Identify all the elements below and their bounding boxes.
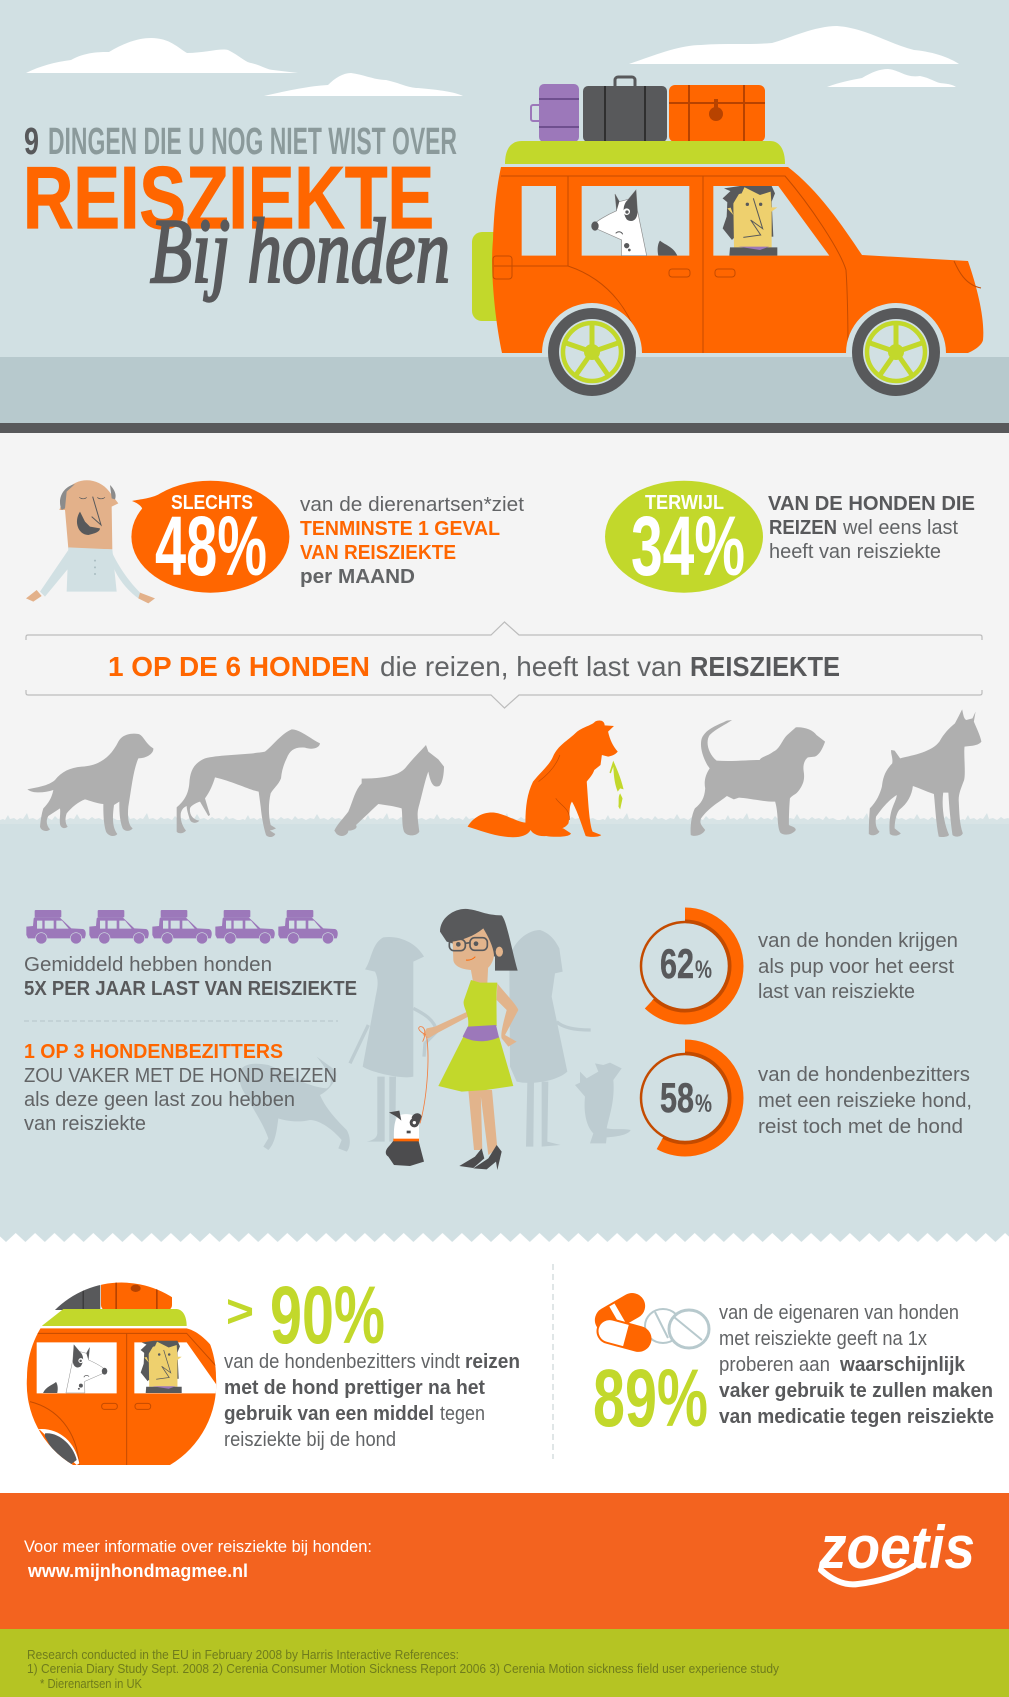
text: 89 percent: vaker gebruik te zullen maken xyxy=(719,1380,993,1402)
dog 6 boxer xyxy=(869,709,981,837)
banner: 1 op de 6 honden: REISZIEKTE xyxy=(690,651,840,682)
purple car icon row xyxy=(26,910,338,944)
zoetis logo: zoetis xyxy=(818,1514,975,1581)
stat: more than 90 percent: 90% xyxy=(270,1270,385,1361)
shadow owner left xyxy=(350,937,437,1142)
text: 90 percent: reizen xyxy=(465,1351,520,1373)
dog 2 greyhound xyxy=(177,729,320,837)
dog 1 labrador xyxy=(27,734,153,836)
legs and shoes xyxy=(468,1090,497,1155)
shadow figures xyxy=(239,930,631,1152)
orange footer xyxy=(0,1493,1009,1629)
wheels xyxy=(548,308,940,396)
wheel arches xyxy=(542,303,946,353)
text: 48 percent: van de dierenartsen*ziet xyxy=(300,494,524,516)
text: 48 percent xyxy=(300,494,524,588)
text: 58 percent: reist toch met de hond xyxy=(758,1116,963,1138)
title: bij honden: Bij honden xyxy=(150,200,450,302)
driver xyxy=(723,186,777,256)
car body xyxy=(492,167,983,353)
text: 62 percent: als pup voor het eerst xyxy=(758,956,954,978)
text: 1 op 3 hondenbezitters: 1 OP 3 HONDENBEZITTERS xyxy=(24,1041,283,1063)
text: 1 op 3 hondenbezitters: van reisziekte xyxy=(24,1113,146,1135)
text: 90 percent xyxy=(224,1351,520,1451)
text: 90 percent: reisziekte bij de hond xyxy=(224,1429,396,1451)
shadow dog left xyxy=(239,1057,350,1152)
text: 58 percent xyxy=(758,1064,972,1138)
text: 90 percent: tegen xyxy=(440,1403,485,1425)
text: 62 percent xyxy=(758,930,958,1003)
stat: more than 90 percent xyxy=(226,1270,385,1361)
lime footnote band xyxy=(0,1629,1009,1697)
clouds xyxy=(26,26,959,96)
text: 90 percent: gebruik van een middel xyxy=(224,1403,434,1425)
dog 5 bloodhound xyxy=(691,720,825,836)
lime footnote band: 1) Cerenia Diary Study Sept. 2008 2) Cerenia Consumer Motion Sickness Report 2006 3) Cerenia Motion sickness field user experience study xyxy=(27,1662,780,1676)
header panel xyxy=(0,0,1009,433)
text: 48 percent: VAN REISZIEKTE xyxy=(300,542,456,564)
luggage xyxy=(531,77,765,142)
text: 89 percent: waarschijnlijk xyxy=(839,1354,966,1376)
lime footnote band: Research conducted in the EU in February 2008 by Harris Interactive References: xyxy=(27,1648,459,1662)
donut chart 58 percent: % xyxy=(695,1090,712,1118)
donut chart 58 percent: 58 xyxy=(660,1074,694,1121)
text: 62 percent: van de honden krijgen xyxy=(758,930,958,952)
text: 1 op 3 hondenbezitters: als deze geen last zou hebben xyxy=(24,1089,295,1111)
banner: 1 op de 6 honden: 1 OP DE 6 HONDEN xyxy=(108,651,370,682)
text: 89 percent: van de eigenaren van honden xyxy=(719,1302,959,1324)
text: 48 percent: per MAAND xyxy=(300,566,415,588)
donut chart 58 percent xyxy=(632,1046,738,1150)
text: 34 percent: VAN DE HONDEN DIE xyxy=(768,493,975,515)
text: 90 percent: met de hond prettiger na het xyxy=(224,1377,485,1399)
shadow owner right xyxy=(509,930,591,1147)
text: 5x per jaar: 5X PER JAAR LAST VAN REISZIEKTE xyxy=(24,978,357,1000)
vet illustration xyxy=(26,480,155,603)
banner: 1 op de 6 honden: die reizen, heeft last van xyxy=(380,651,682,682)
car illustration xyxy=(472,77,983,396)
stat: more than 90 percent: > xyxy=(226,1285,254,1337)
small dog xyxy=(386,1111,424,1166)
orange sick dog xyxy=(468,721,624,837)
text: 1 op 3 hondenbezitters: ZOU VAKER MET DE HOND REIZEN xyxy=(24,1065,337,1087)
lime footnote band: * Dierenartsen in UK xyxy=(40,1677,143,1691)
woman with dog xyxy=(386,909,518,1170)
donut chart 62 percent: 62 xyxy=(660,940,694,987)
statistics panel background xyxy=(0,433,1009,825)
callout: 34 percent: 34% xyxy=(631,499,745,593)
title line: 9 xyxy=(24,121,39,163)
text: 34 percent: REIZEN xyxy=(769,517,837,539)
text: 1 op 3 hondenbezitters xyxy=(24,1041,337,1135)
text: 62 percent: last van reisziekte xyxy=(758,981,915,1003)
text: 89 percent: met reisziekte geeft na 1x xyxy=(719,1328,927,1350)
neck and face xyxy=(453,928,503,983)
title line xyxy=(24,121,457,163)
text: 58 percent: met een reiszieke hond, xyxy=(758,1090,972,1112)
windows xyxy=(522,186,829,256)
text: 34 percent: wel eens last xyxy=(842,517,958,539)
grass and lower blue panel xyxy=(0,810,1009,1493)
donut chart 62 percent xyxy=(632,914,738,1018)
text: 58 percent: van de hondenbezitters xyxy=(758,1064,970,1086)
callout: 48 percent: SLECHTS xyxy=(171,492,253,514)
title line: DINGEN DIE U NOG NIET WIST OVER xyxy=(48,121,457,163)
callout: 34 percent xyxy=(605,481,763,593)
dog in window xyxy=(591,190,677,256)
dress xyxy=(438,980,513,1092)
text: 5x per jaar: Gemiddeld hebben honden xyxy=(24,954,272,976)
stat: 89 percent: 89% xyxy=(593,1353,708,1444)
donut chart 62 percent: % xyxy=(695,956,712,984)
text: 89 percent: van medicatie tegen reisziekte xyxy=(719,1406,994,1428)
callout: 34 percent: TERWIJL xyxy=(645,492,724,514)
arms xyxy=(423,983,518,1047)
dog 3 schnauzer xyxy=(334,745,444,836)
orange footer: Voor meer informatie over reisziekte bij honden: xyxy=(24,1537,372,1556)
hair xyxy=(440,909,518,971)
car in circle xyxy=(20,1280,220,1470)
orange footer: www.mijnhondmagmee.nl xyxy=(27,1561,248,1581)
text: 34 percent xyxy=(768,493,975,563)
banner: 1 op de 6 honden xyxy=(26,622,982,708)
spare wheel xyxy=(472,232,507,321)
text: 89 percent: proberen aan xyxy=(719,1354,830,1376)
dog silhouettes xyxy=(27,709,981,837)
text: 48 percent: TENMINSTE 1 GEVAL xyxy=(300,518,500,540)
callout: 48 percent: 48% xyxy=(155,499,267,593)
text: 90 percent: van de hondenbezitters vindt xyxy=(224,1351,460,1373)
text: 34 percent: heeft van reisziekte xyxy=(769,541,941,563)
text: 89 percent xyxy=(719,1302,994,1428)
shadow dog right xyxy=(575,1063,631,1143)
text: 5x per jaar xyxy=(24,954,357,1000)
callout: 48 percent xyxy=(131,481,289,593)
leash xyxy=(419,1027,428,1123)
title: reisziekte: REISZIEKTE xyxy=(23,148,434,247)
roof rack xyxy=(505,141,785,164)
icon: pills xyxy=(591,1290,709,1354)
